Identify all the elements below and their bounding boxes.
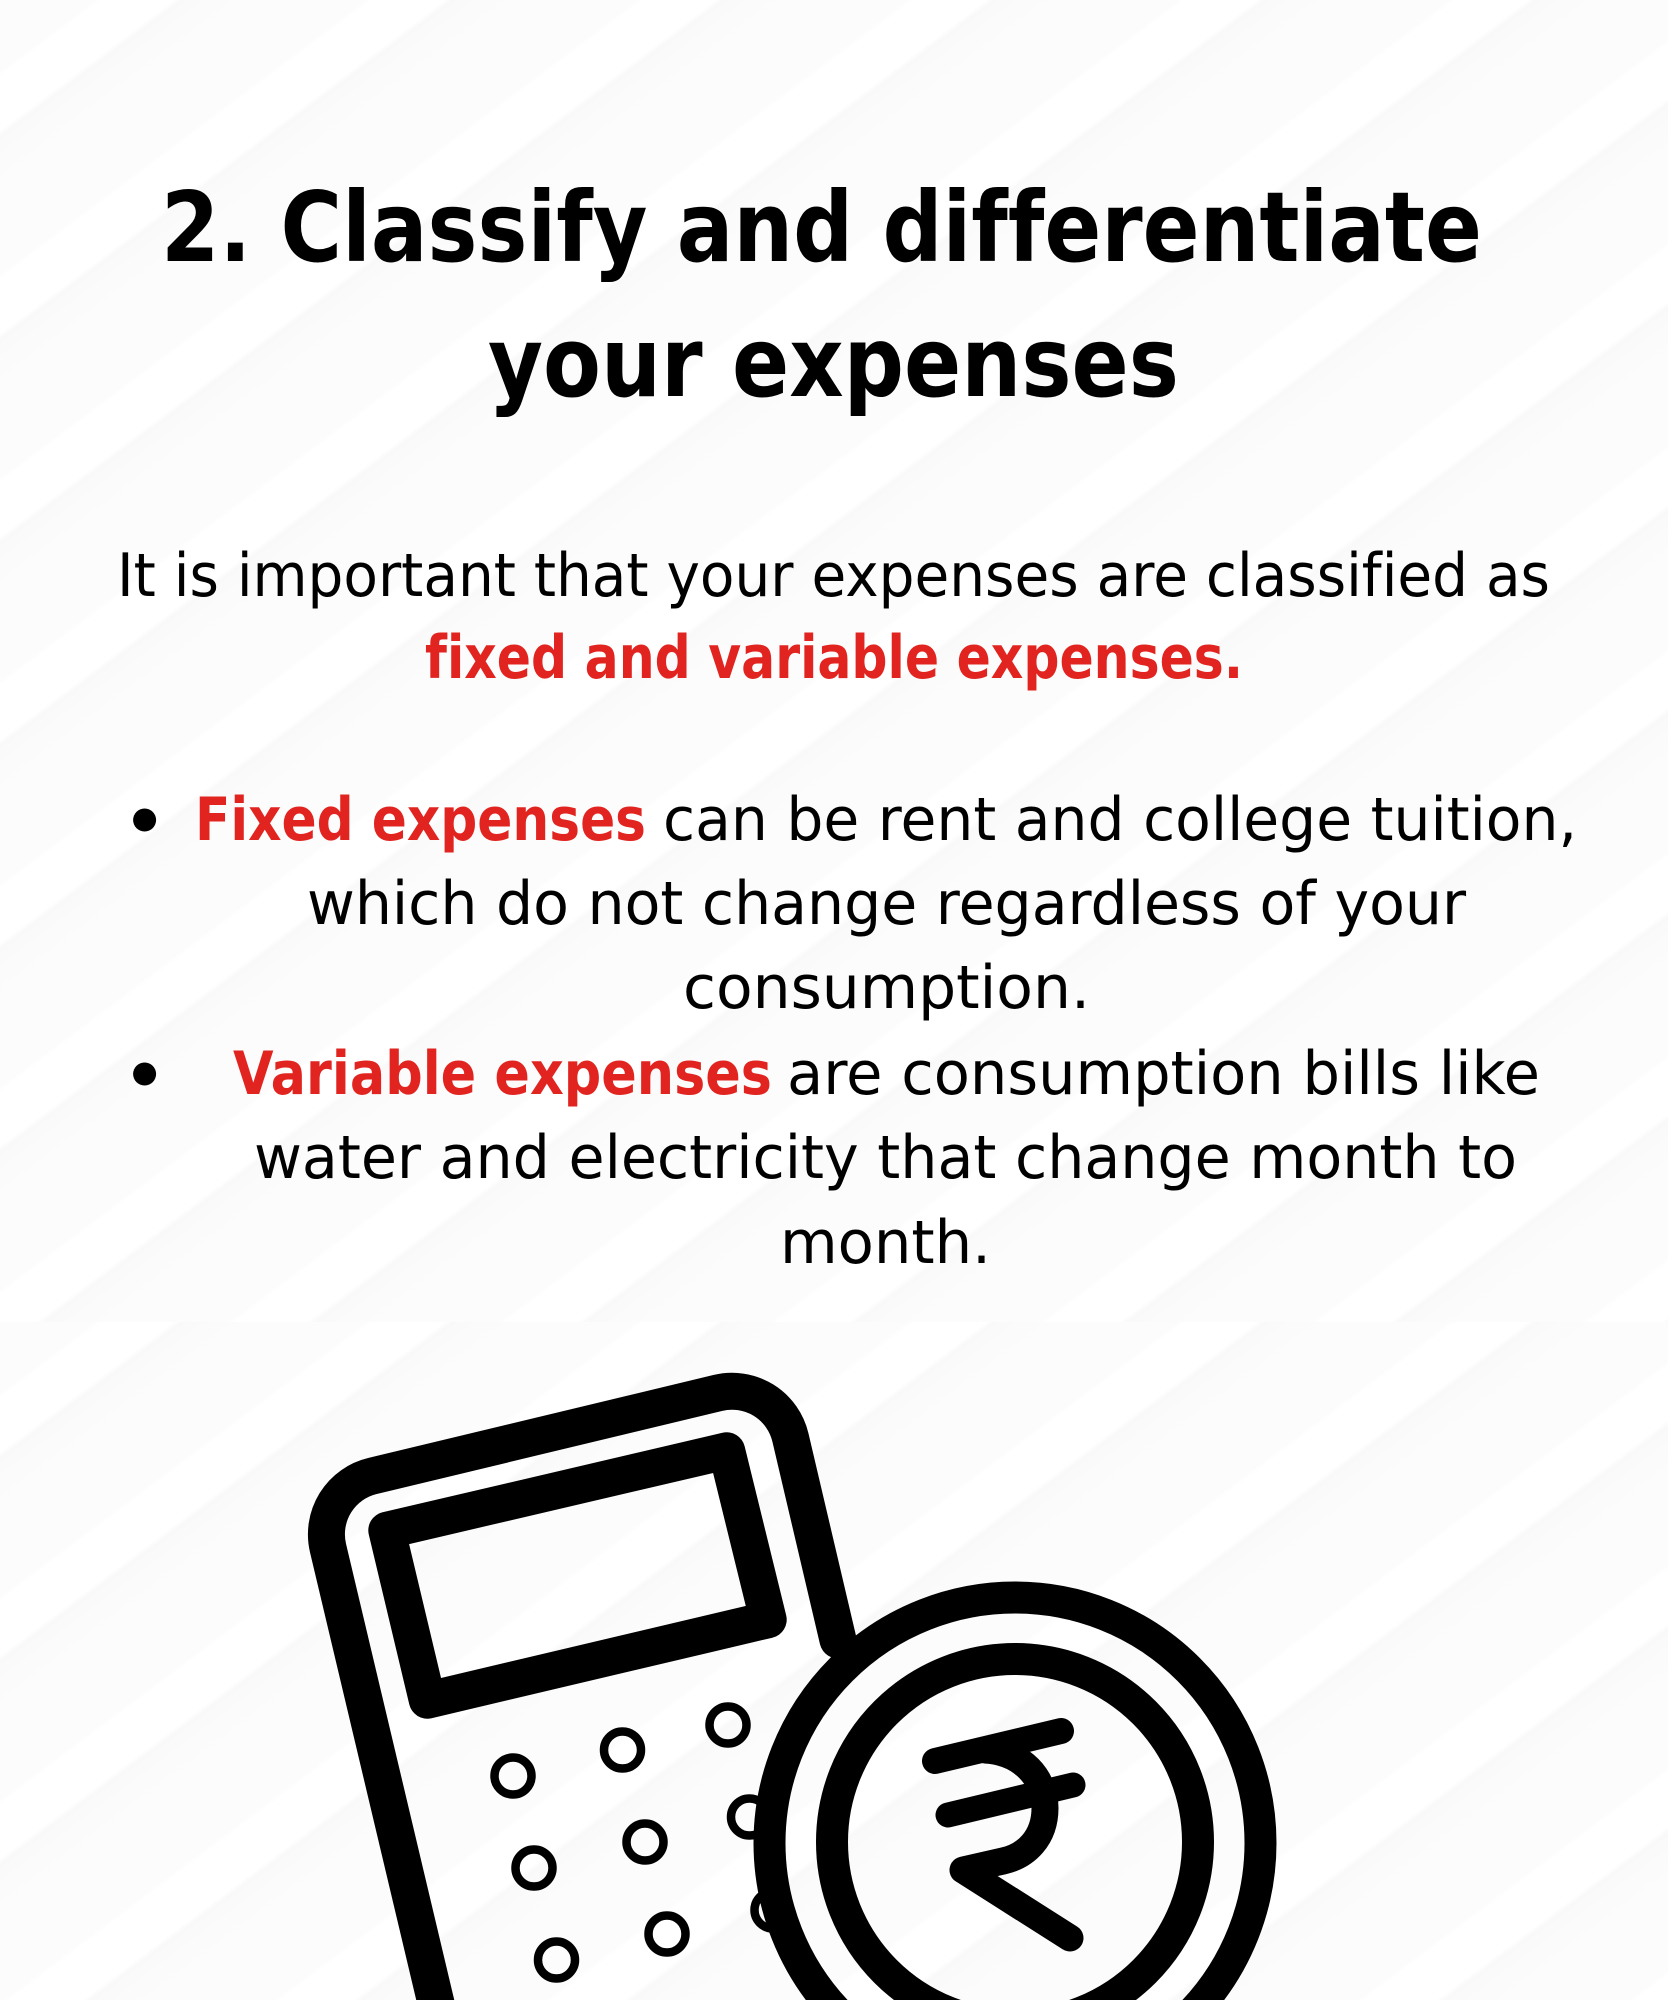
bullet: fixed expenses: Fixed expenses — [195, 785, 646, 855]
title: 2. Classify and differentiate — [161, 171, 1482, 284]
bullet: fixed expenses: consumption. — [683, 953, 1090, 1023]
bullet: variable expenses: are consumption bills like — [787, 1039, 1540, 1109]
bullet: fixed expenses — [133, 785, 1577, 1023]
intro text: fixed and variable expenses. — [425, 623, 1243, 693]
rupee coin — [770, 1598, 1260, 2000]
intro text: It is important that your expenses are classified as — [117, 541, 1550, 611]
icon: calculator with rupee coin — [326, 1391, 1260, 2000]
calculator — [326, 1391, 838, 2000]
bullet: fixed expenses: which do not change regardless of your — [307, 869, 1466, 939]
title — [161, 171, 1482, 419]
intro text — [117, 541, 1550, 693]
bullet: variable expenses: water and electricity that change month to — [254, 1123, 1517, 1193]
bullet: variable expenses: Variable expenses — [233, 1039, 772, 1109]
title: your expenses — [488, 306, 1179, 419]
bullet: variable expenses: month. — [780, 1208, 991, 1278]
bullet: fixed expenses: can be rent and college tuition, — [663, 785, 1577, 855]
bullet: variable expenses — [133, 1039, 1540, 1278]
